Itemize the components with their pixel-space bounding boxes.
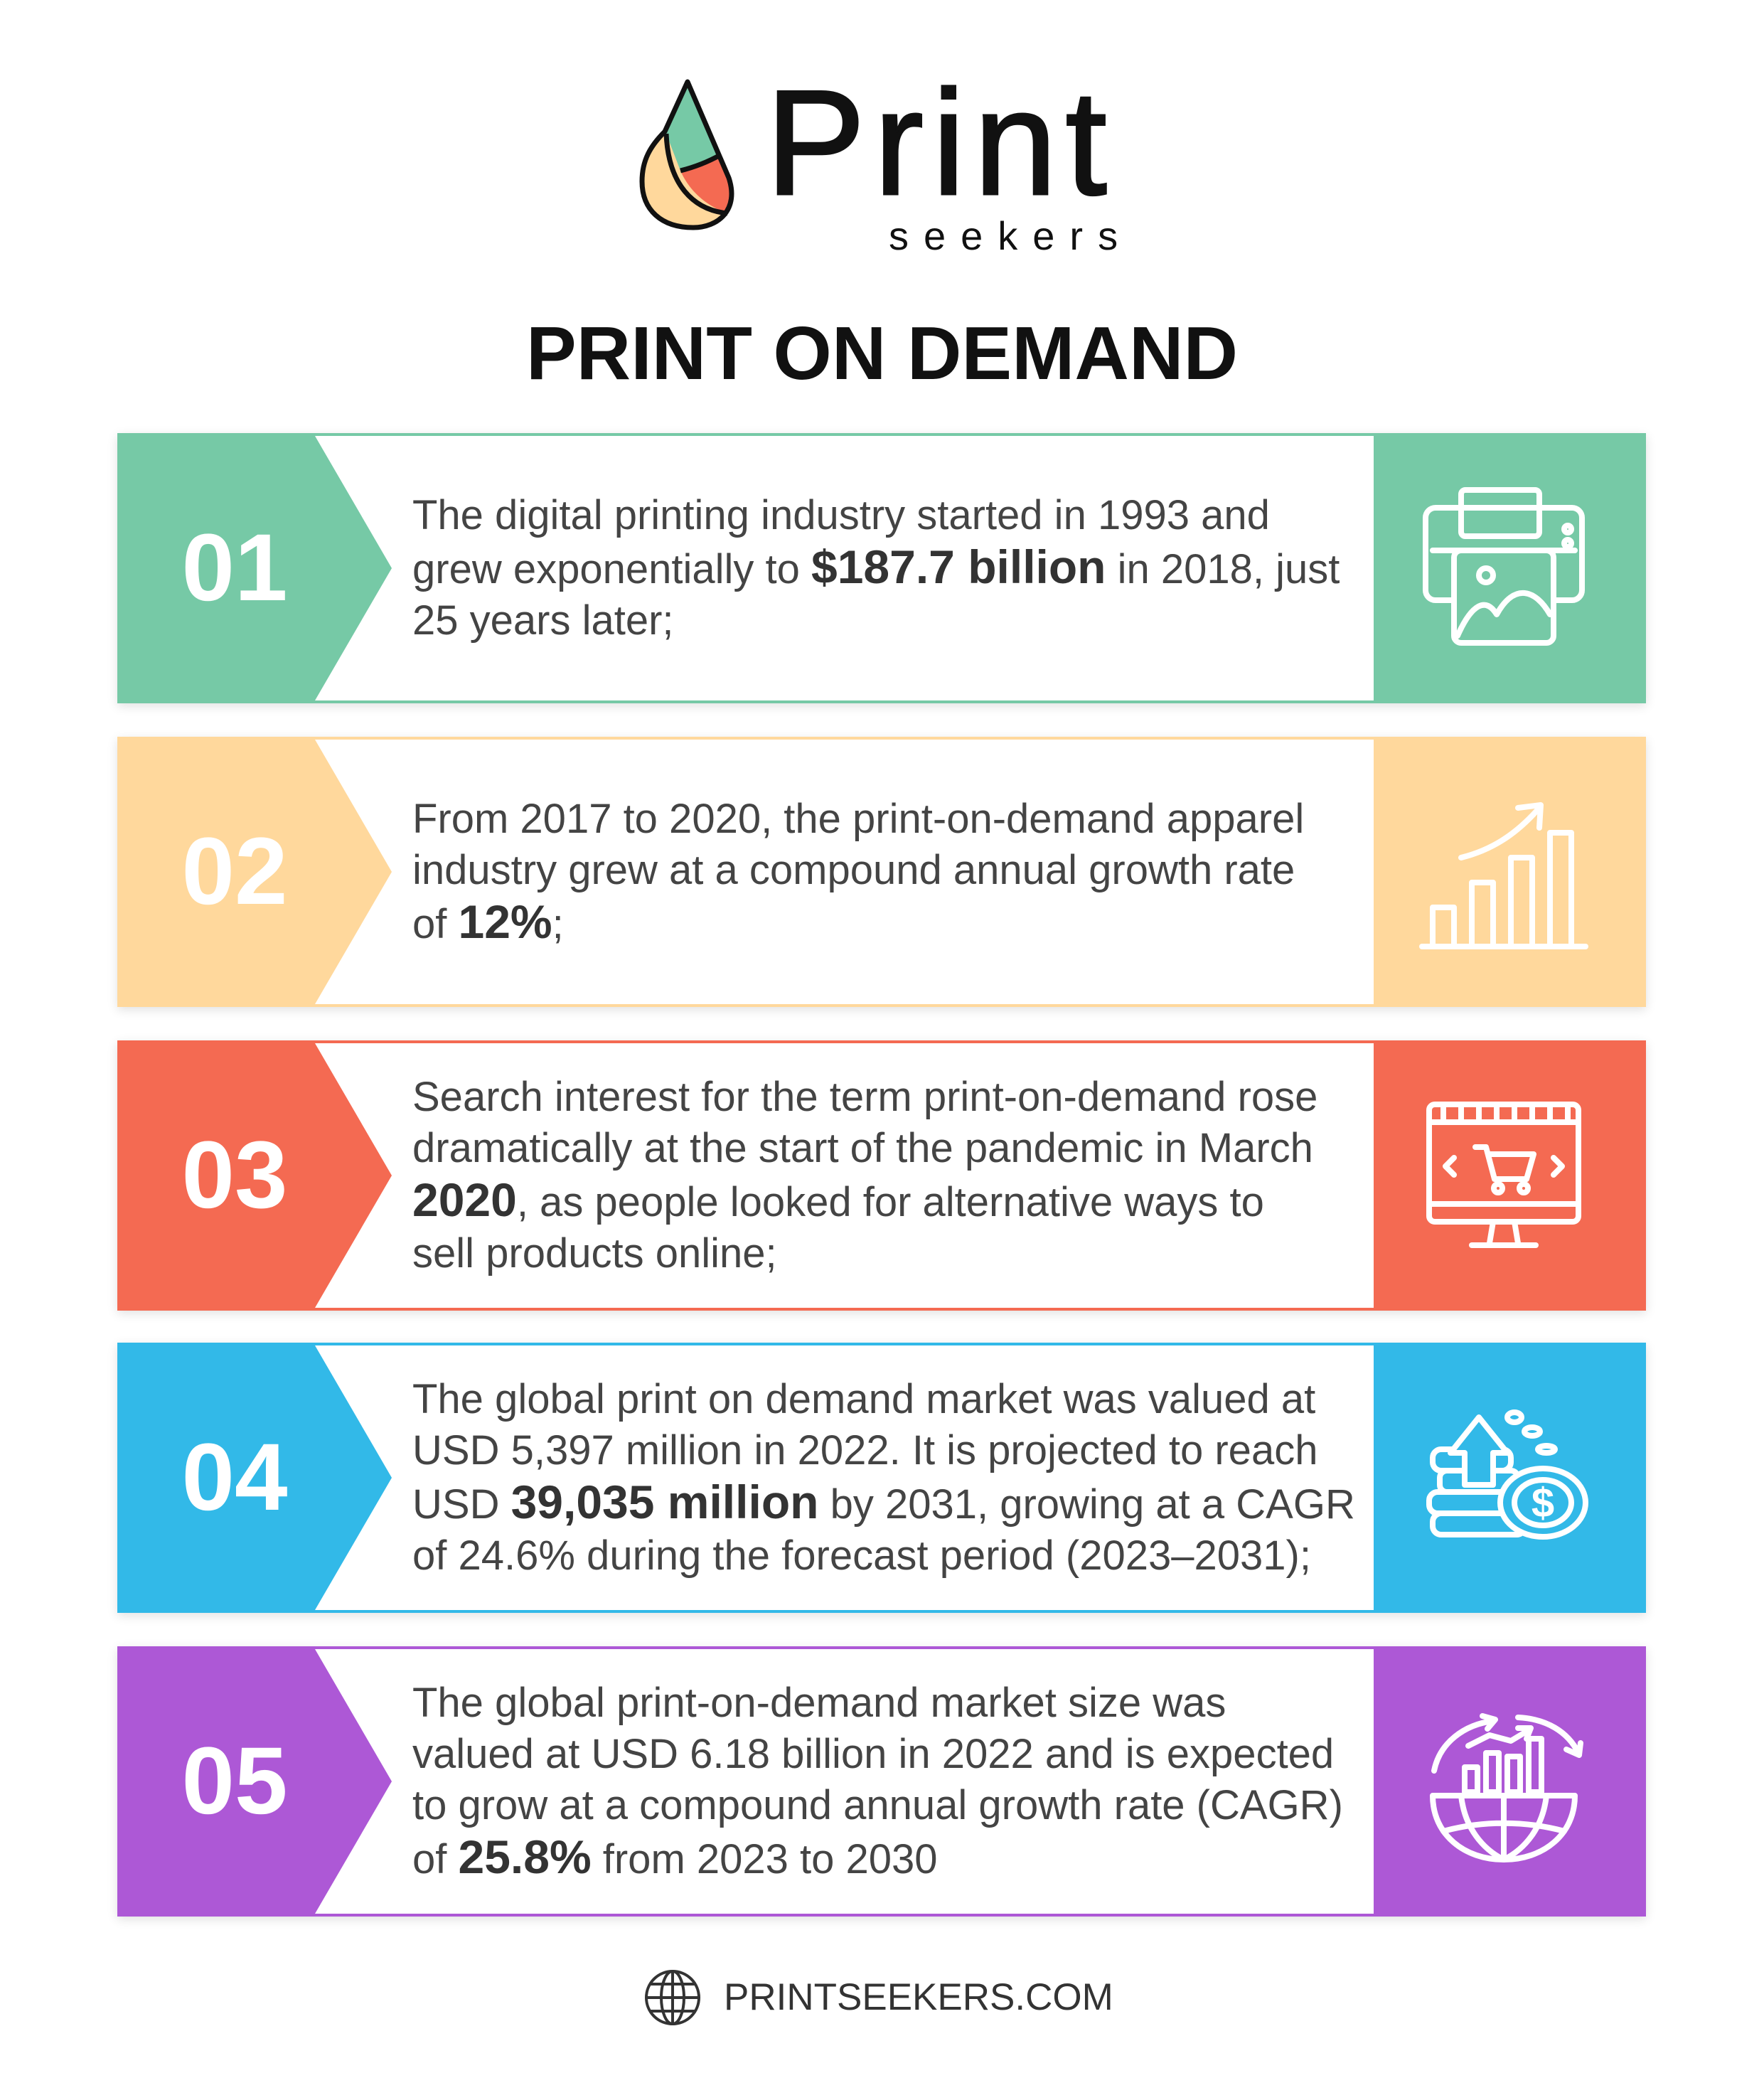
text 02: industry grew at a compound annual growth rate	[412, 847, 1295, 893]
text 04: The global print on demand market was valued at	[412, 1376, 1315, 1422]
text 02	[412, 796, 1304, 948]
footer text: PRINTSEEKERS.COM	[724, 1976, 1113, 2018]
number 02: 02	[181, 819, 288, 924]
panel: 04	[117, 1343, 1646, 1613]
text 04: of 24.6% during the forecast period (2023–2031);	[412, 1533, 1311, 1579]
title: PRINT ON DEMAND	[526, 311, 1238, 395]
number 04: 04	[181, 1424, 288, 1530]
text 04: USD 5,397 million in 2022. It is projected to reach	[412, 1427, 1317, 1473]
text 04	[412, 1376, 1355, 1579]
text 05: to grow at a compound annual growth rate (CAGR)	[412, 1782, 1343, 1828]
text 03: sell products online;	[412, 1230, 777, 1276]
icon: bar chart growth	[1419, 802, 1588, 949]
text 01: grew exponentially to $187.7 billion in 2018, just	[412, 540, 1340, 593]
text 01: The digital printing industry started in 1993 and	[412, 492, 1270, 538]
text 02: of 12%;	[412, 895, 564, 948]
text 02: From 2017 to 2020, the print-on-demand apparel	[412, 796, 1304, 842]
text 04: USD 39,035 million by 2031, growing at a CAGR	[412, 1476, 1355, 1528]
icon: global growth	[1430, 1713, 1583, 1862]
text 05: valued at USD 6.18 billion in 2022 and is expected	[412, 1731, 1334, 1777]
panel: 02	[117, 737, 1646, 1007]
panel: 05	[117, 1646, 1646, 1917]
logo text: Print	[766, 59, 1116, 226]
text 03: Search interest for the term print-on-demand rose	[412, 1074, 1317, 1120]
number 01: 01	[181, 515, 288, 621]
text 01: 25 years later;	[412, 597, 674, 644]
icon: printer	[1423, 487, 1585, 646]
number 03: 03	[181, 1122, 288, 1228]
text 05	[412, 1680, 1343, 1883]
logo: seekers	[889, 213, 1133, 258]
number 05: 05	[181, 1728, 288, 1834]
icon: drop	[640, 80, 734, 230]
panel: 03	[117, 1040, 1646, 1311]
panel: 01	[117, 433, 1646, 703]
text 05: The global print-on-demand market size was	[412, 1680, 1226, 1726]
text 01	[412, 492, 1340, 644]
icon: money growth	[1426, 1409, 1588, 1540]
text 03: dramatically at the start of the pandemic in March	[412, 1125, 1313, 1171]
icon: money growth: $	[1532, 1480, 1554, 1526]
text 05: of 25.8% from 2023 to 2030	[412, 1830, 938, 1883]
icon: globe	[645, 1970, 700, 2025]
text 03	[412, 1074, 1317, 1276]
logo	[640, 59, 1133, 258]
icon: online shop monitor	[1426, 1102, 1581, 1248]
footer	[645, 1970, 1113, 2025]
text 03: 2020, as people looked for alternative ways to	[412, 1173, 1264, 1226]
